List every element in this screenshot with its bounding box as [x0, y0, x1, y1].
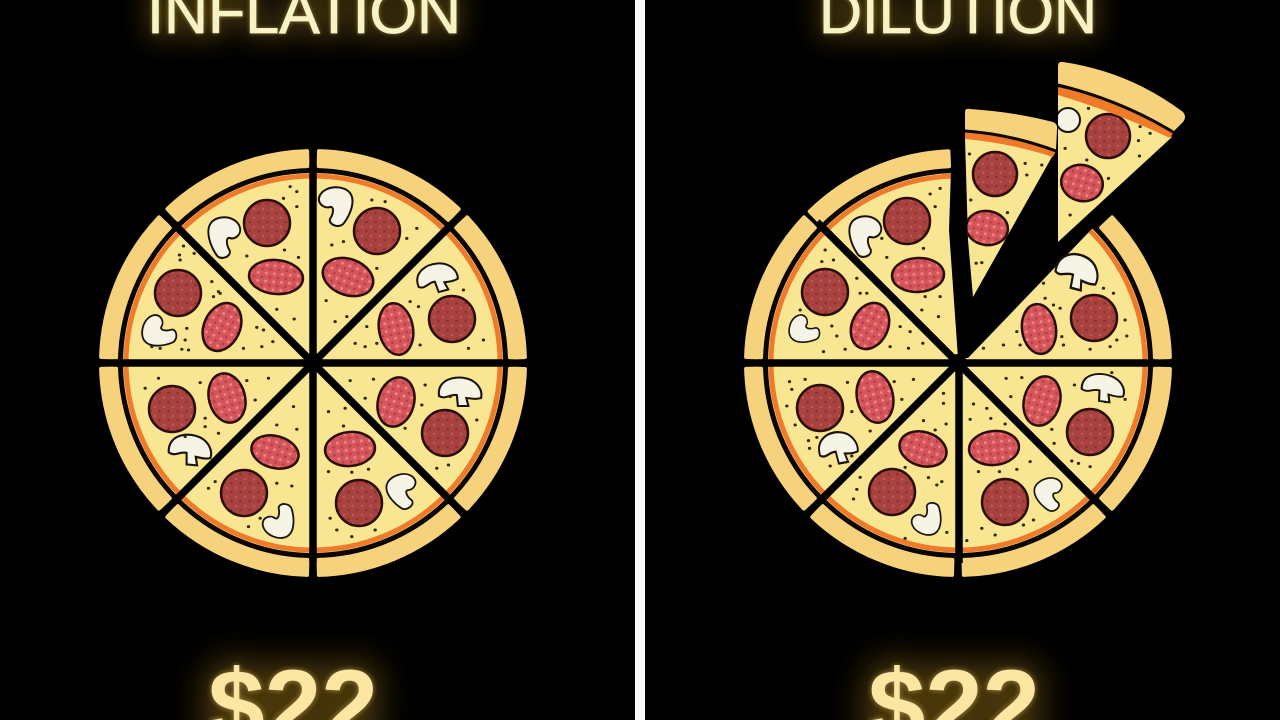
sauce and cheese base	[766, 171, 1150, 555]
divider	[635, 0, 645, 720]
panel: dilution	[744, 0, 1185, 720]
pepperoni toppings	[149, 200, 475, 526]
pepperoni toppings	[797, 198, 1117, 525]
small slice: upper lifted piece	[1056, 62, 1185, 242]
mushroom toppings	[786, 216, 1126, 539]
pizza: eight whole slices	[60, 110, 566, 616]
panel: inflation	[60, 0, 566, 720]
herb specks	[145, 187, 484, 537]
sauce and cheese base	[121, 171, 505, 555]
herb specks lower half	[787, 373, 1125, 541]
crust pieces	[60, 110, 566, 616]
pizza: with one slice cut into two smaller slices	[705, 140, 1211, 616]
slice cut lines	[758, 222, 1158, 563]
crust pieces	[705, 151, 1211, 616]
slice cut lines	[113, 163, 513, 563]
herb specks upper half	[800, 188, 1127, 352]
small slice: lower lifted piece	[964, 109, 1057, 297]
empty wedge	[949, 140, 1140, 358]
mushroom toppings	[139, 187, 481, 542]
